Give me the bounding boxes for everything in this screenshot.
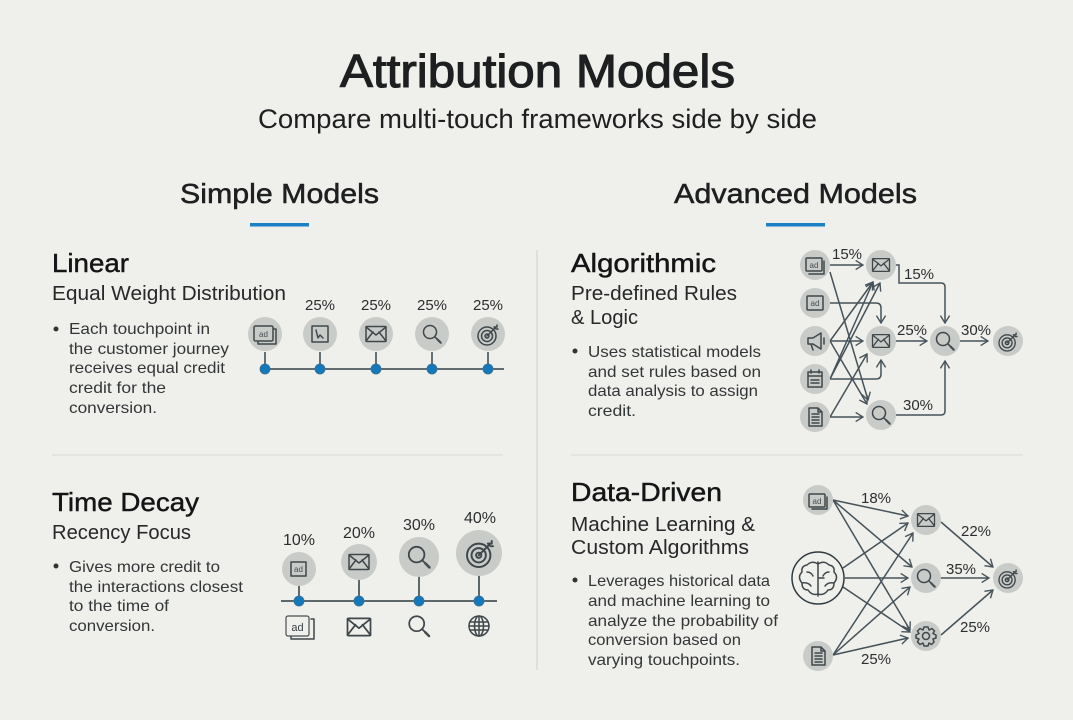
column heading: advanced models: Advanced Models (674, 178, 917, 209)
text block: data-driven description: conversion based on (588, 632, 741, 649)
chart: algorithmic flow: 30% (961, 322, 991, 339)
icon: megaphone (808, 333, 824, 350)
chart: time decay timeline: 20% (343, 525, 375, 542)
subheading: algorithmic (571, 283, 737, 329)
panel: time decay (52, 487, 502, 639)
text block: time decay description: the interactions closest (69, 579, 244, 596)
icon: ad 1: ad (810, 261, 818, 270)
icon: ad circle: ad (294, 565, 303, 574)
chart: algorithmic flow: 15% (832, 246, 862, 263)
panel: data-driven (571, 477, 1023, 671)
chart: linear timeline: 25% (417, 297, 447, 314)
text block: linear description (54, 321, 229, 417)
icon: brain (792, 552, 844, 604)
icon: email circle (349, 554, 369, 570)
icon: search (918, 570, 935, 587)
chart: algorithmic flow (800, 246, 1023, 432)
column heading: advanced models (674, 178, 917, 226)
chart: data-driven network: 22% (961, 523, 991, 540)
text block: data-driven description: varying touchpoints. (588, 652, 740, 669)
subheading: data-driven: Machine Learning & (571, 514, 756, 536)
text block: linear description: conversion. (69, 400, 157, 417)
icon: email (918, 514, 934, 526)
icon: ad 1 (806, 258, 824, 274)
subtitle: Compare multi-touch frameworks side by side (258, 104, 817, 134)
column heading: simple models: Simple Models (180, 178, 379, 209)
chart: data-driven network (792, 485, 1023, 671)
chart: data-driven network: 35% (946, 561, 976, 578)
subheading: algorithmic: & Logic (571, 307, 638, 329)
icon: email top (872, 259, 890, 271)
icon: search (424, 326, 441, 343)
text block: data-driven description: analyze the probability of (588, 613, 779, 630)
icon: document (809, 408, 822, 426)
chart: linear timeline: 25% (305, 297, 335, 314)
icon: target (999, 333, 1017, 351)
text block: linear description: the customer journey (69, 341, 229, 358)
icon: ad: ad (259, 330, 268, 339)
arrows: data-driven network (833, 500, 993, 655)
panel: linear (52, 248, 505, 417)
icon: search below (409, 616, 429, 636)
chart: time decay timeline: 40% (464, 510, 496, 527)
text block: time decay description (54, 559, 244, 635)
icon: ad circle (291, 562, 306, 576)
chart: data-driven network: 18% (861, 490, 891, 507)
text block: algorithmic description: credit. (588, 403, 636, 420)
text block: time decay description: Gives more credit to (69, 559, 220, 576)
heading: time decay: Time Decay (52, 487, 199, 517)
text block: algorithmic description: data analysis to assign (588, 383, 758, 400)
icon: target (478, 325, 498, 345)
text block: algorithmic description: and set rules based on (588, 364, 761, 381)
chart: linear timeline (248, 297, 505, 374)
text block: data-driven description: and machine learning to (588, 593, 770, 610)
icon: calendar (808, 370, 822, 387)
chart: time decay timeline: 30% (403, 517, 435, 534)
chart: data-driven network: 25% (960, 619, 990, 636)
chart: data-driven network: 25% (861, 651, 891, 668)
chart: linear timeline: 25% (473, 297, 503, 314)
icon: globe below (469, 616, 489, 636)
subheading: time decay: Recency Focus (52, 522, 191, 544)
text block: time decay description: to the time of (69, 598, 170, 615)
text block: data-driven description (572, 573, 779, 669)
icon: document (812, 647, 825, 665)
icon: email middle (872, 335, 890, 347)
icon: search bottom (872, 406, 890, 424)
text block: data-driven description: Leverages historical data (588, 573, 770, 590)
icon: target circle (467, 541, 493, 567)
icon: ad 2 (807, 296, 823, 310)
chart: algorithmic flow: 25% (897, 322, 927, 339)
icon: email below (348, 618, 370, 636)
chart: linear timeline: 25% (361, 297, 391, 314)
icon: gear (916, 627, 936, 646)
heading: data-driven: Data-Driven (571, 477, 722, 507)
subheading: algorithmic: Pre-defined Rules (571, 283, 737, 305)
chart: time decay timeline (281, 510, 502, 639)
icon: ad 2: ad (811, 299, 819, 308)
arrows: algorithmic flow (830, 265, 988, 417)
text block: linear description: receives equal credit (69, 360, 226, 377)
chart: time decay timeline: 10% (283, 532, 315, 549)
icon: ad below (286, 616, 314, 639)
heading: algorithmic: Algorithmic (571, 248, 716, 278)
icon: search right (936, 332, 954, 350)
icon: ad below: ad (291, 622, 304, 634)
subheading: data-driven (571, 514, 756, 559)
icon: ad: ad (813, 497, 821, 506)
icon: ad (254, 326, 276, 344)
text block: algorithmic description: Uses statistical models (588, 344, 761, 361)
subheading: data-driven: Custom Algorithms (571, 537, 749, 559)
icon: target (999, 570, 1017, 588)
text block: linear description: Each touchpoint in (69, 321, 210, 338)
icon: ad (809, 494, 827, 509)
panel: algorithmic (571, 246, 1023, 432)
column heading: simple models (180, 178, 379, 226)
subheading: linear: Equal Weight Distribution (52, 283, 286, 305)
text block: algorithmic description (572, 344, 761, 420)
chart: algorithmic flow: 30% (903, 397, 933, 414)
icon: search circle (409, 547, 430, 568)
title: Attribution Models (340, 45, 735, 97)
heading: linear: Linear (52, 248, 129, 278)
chart: algorithmic flow: 15% (904, 266, 934, 283)
icon: click (312, 326, 328, 342)
icon: email (366, 326, 386, 342)
text block: time decay description: conversion. (69, 618, 155, 635)
text block: linear description: credit for the (69, 380, 166, 397)
